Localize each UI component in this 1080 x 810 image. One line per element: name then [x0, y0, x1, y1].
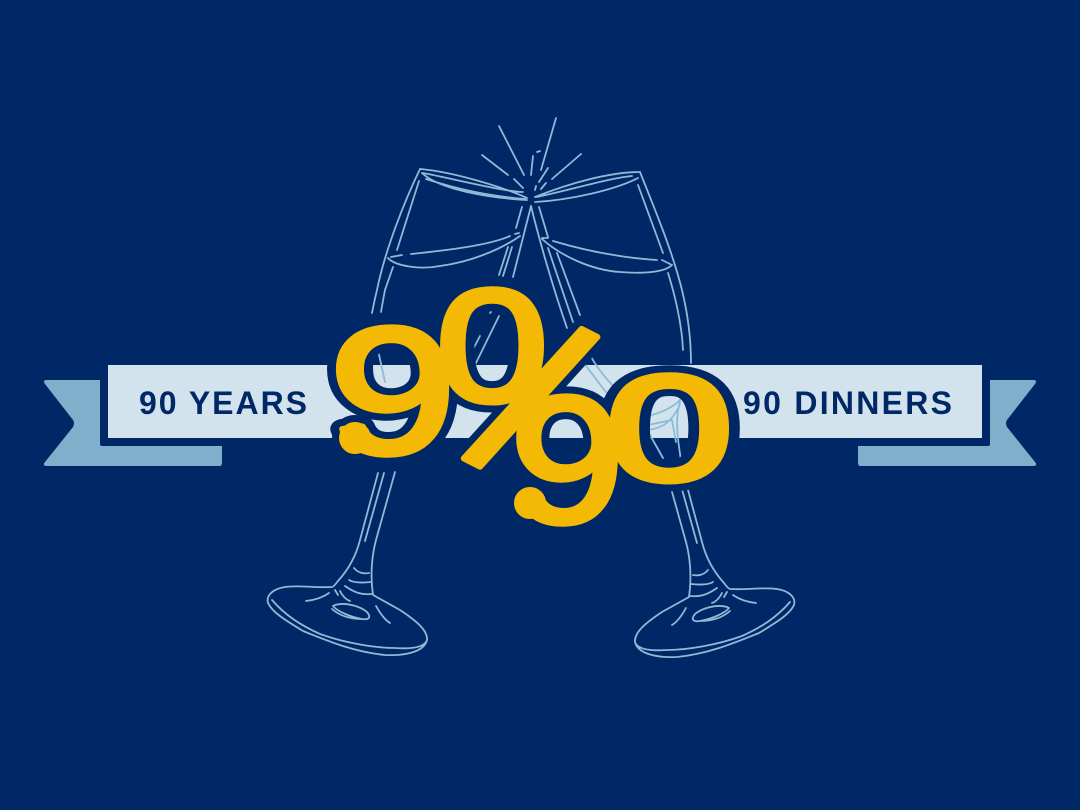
headline outline — [329, 256, 733, 560]
right glass bowl — [531, 172, 691, 460]
illustration: clinking glasses — [268, 118, 794, 657]
headline digits: 9 — [329, 290, 456, 491]
headline digits: 9 — [510, 359, 624, 560]
ribbon tail: right — [858, 380, 1036, 466]
headline digits: 0 — [436, 256, 548, 435]
ribbon tail: left — [44, 380, 222, 466]
left glass bowl — [372, 169, 531, 395]
sparkle burst — [482, 118, 581, 190]
headline number: 90/90 — [329, 256, 733, 560]
headline digits: / — [443, 271, 616, 529]
headline digits — [329, 256, 733, 560]
left glass stem and foot — [268, 472, 427, 655]
ribbon banner — [44, 365, 1036, 466]
label: 90 years: 90 YEARS — [139, 385, 307, 421]
right glass stem and foot — [635, 474, 794, 657]
headline digits: 0 — [605, 345, 733, 512]
ribbon face — [108, 365, 982, 438]
label: 90 dinners: 90 DINNERS — [743, 385, 952, 421]
ribbon shadow — [100, 365, 990, 446]
